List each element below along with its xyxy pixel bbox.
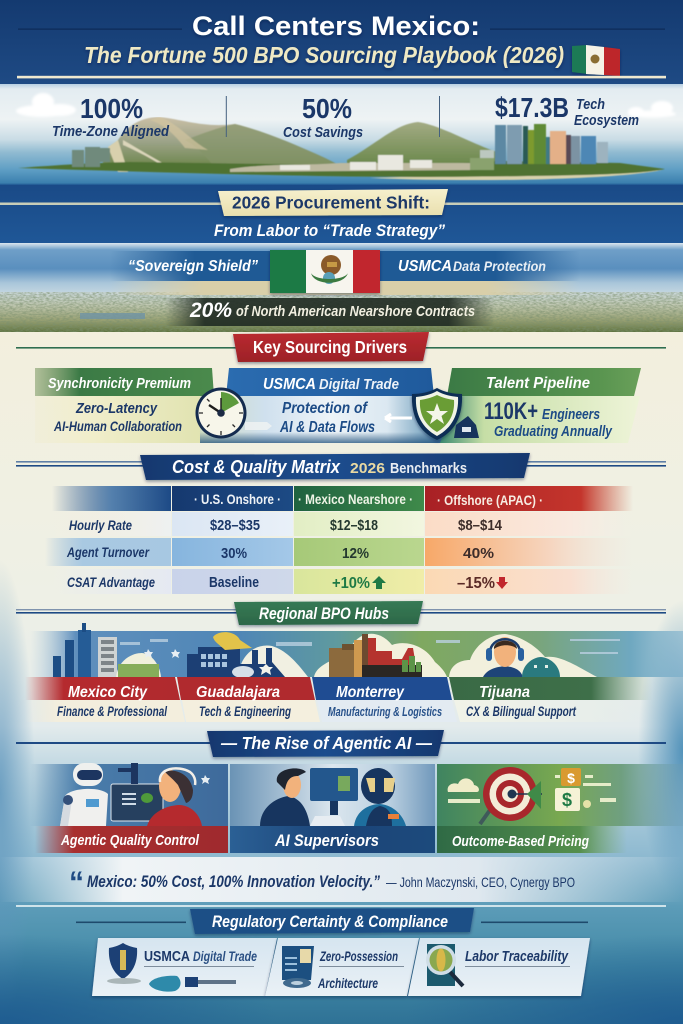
section heading: cost and quality matrix: Benchmarks	[390, 461, 467, 477]
sovereign shield band: Data Protection	[453, 258, 546, 274]
icon: data cable plug	[149, 976, 236, 992]
driver: talent pipeline	[440, 368, 641, 443]
driver: synchronicity premium: Zero-Latency	[75, 400, 158, 417]
stat: 50% cost savings	[283, 93, 363, 141]
quote band: Mexico: 50% Cost, 100% Innovation Velocity.”	[87, 872, 380, 891]
section heading: regional BPO hubs: Regional BPO Hubs	[259, 605, 389, 623]
driver: usmca digital trade: Protection of	[282, 400, 368, 417]
table row: hourly rate: $28–$35	[210, 518, 260, 534]
driver: talent pipeline: Talent Pipeline	[486, 375, 590, 392]
icon: clock	[196, 388, 246, 438]
label: agentic quality control	[35, 826, 228, 853]
card: zero-possession architecture: Zero-Possession	[319, 948, 398, 964]
title: Call Centers Mexico:	[192, 11, 480, 41]
hub: Mexico City: Finance & Professional	[57, 704, 167, 719]
card: zero-possession architecture	[265, 938, 419, 996]
hub: Monterrey	[312, 677, 457, 722]
section heading: the rise of agentic AI	[16, 730, 666, 757]
table row: csat advantage	[52, 569, 633, 594]
hub: Mexico City	[25, 677, 185, 722]
icon: compliance monitor	[282, 946, 314, 988]
sovereign shield band: “Sovereign Shield”	[128, 258, 258, 275]
icon: supervisor monitor	[310, 768, 358, 826]
hubs illustration band	[30, 623, 683, 678]
badge: 2026 procurement shift: 2026 Procurement Shift:	[232, 192, 430, 212]
hub: Tijuana: CX & Bilingual Support	[466, 704, 576, 719]
section heading: key sourcing drivers: Key Sourcing Drivers	[253, 337, 407, 357]
table header row: · Mexico Nearshore ·	[298, 492, 413, 507]
table row: agent turnover	[45, 538, 633, 566]
label: outcome-based pricing: Outcome-Based Pricing	[452, 833, 589, 850]
page background	[0, 332, 683, 1024]
table: cost and quality matrix	[45, 486, 633, 594]
section heading: the rise of agentic AI: — The Rise of Agentic AI —	[220, 733, 432, 753]
quote band: “	[69, 866, 84, 899]
section heading: regulatory certainty and compliance	[16, 905, 666, 934]
icon: dollar tiles	[555, 768, 591, 811]
stat: $17.3B tech ecosystem	[495, 92, 639, 129]
subtitle: The Fortune 500 BPO Sourcing Playbook (2026)	[84, 42, 564, 68]
icon: monitor	[111, 763, 163, 821]
icon: shield	[412, 388, 462, 440]
hub: Guadalajara: Guadalajara	[196, 684, 280, 701]
cityscape strip	[0, 281, 683, 332]
section heading: key sourcing drivers	[16, 332, 666, 362]
hub: Guadalajara: Tech & Engineering	[199, 704, 292, 719]
sovereign shield band: USMCA	[398, 258, 452, 275]
hero panel: island skyline with stats	[0, 84, 683, 185]
icon: Mexican flag small	[572, 45, 620, 76]
table row: hourly rate: $12–$18	[330, 518, 378, 534]
driver: talent pipeline: 110K+	[484, 398, 538, 425]
driver: usmca digital trade	[200, 368, 460, 443]
table header row: · Offshore (APAC) ·	[437, 493, 543, 508]
icon: Guadalajara tech campus	[187, 632, 308, 678]
table row: agent turnover: 40%	[463, 545, 494, 562]
stat: 50% cost savings: Cost Savings	[283, 124, 363, 141]
table row: csat advantage: Baseline	[209, 575, 259, 591]
sovereign shield band	[110, 251, 580, 281]
icon: clouds	[16, 93, 676, 118]
card: outcome-based pricing	[437, 764, 683, 826]
callout: 20% nearshore contracts: 20%	[189, 299, 232, 322]
driver: usmca digital trade: USMCA	[263, 376, 316, 393]
subheading: trade strategy: From Labor to “Trade Strategy”	[214, 222, 446, 240]
driver: talent pipeline: Engineers	[542, 406, 600, 423]
stat: $17.3B tech ecosystem: Tech	[576, 96, 605, 113]
icon: robot supervisor	[354, 768, 406, 826]
card: AI supervisors	[230, 764, 435, 826]
hub: Tijuana: Tijuana	[479, 684, 530, 701]
procurement shift panel	[0, 185, 683, 332]
icon: woman agent	[147, 768, 202, 826]
icon: target with dart	[480, 767, 542, 824]
label: AI supervisors: AI Supervisors	[274, 831, 379, 850]
quote band: — John Maczynski, CEO, Cynergy BPO	[386, 874, 575, 890]
island illustration	[18, 117, 665, 180]
driver: synchronicity premium: Synchronicity Premium	[48, 375, 191, 392]
icon: green up arrow	[372, 576, 386, 589]
icon: Mexico City skyline	[53, 623, 180, 677]
panel: compliance cards	[92, 938, 590, 996]
driver: talent pipeline: Graduating Annually	[494, 423, 613, 440]
table row: csat advantage: CSAT Advantage	[67, 575, 155, 590]
icon: cloud	[448, 778, 479, 792]
label: outcome-based pricing	[437, 826, 627, 853]
driver: usmca digital trade: AI & Data Flows	[279, 419, 375, 436]
table row: agent turnover: 30%	[221, 545, 247, 562]
icon: small campus building	[454, 416, 479, 438]
callout: 20% nearshore contracts	[165, 298, 495, 326]
section heading: cost and quality matrix: Cost & Quality Matrix	[172, 457, 341, 477]
table row: hourly rate	[52, 512, 633, 536]
stat: 100% time-zone aligned	[52, 93, 170, 140]
icon: Mexican flag large	[270, 250, 380, 293]
icon: shield with bar	[107, 943, 141, 984]
icon: dollar tiles: $	[567, 770, 575, 786]
icon: Monterrey industrial plant	[314, 634, 447, 677]
icon: tech towers	[495, 124, 608, 164]
icon: magnifier globe	[426, 944, 463, 986]
label: agentic quality control: Agentic Quality Control	[60, 832, 200, 849]
table row: csat advantage: –15%	[457, 575, 495, 592]
table header row: · U.S. Onshore ·	[194, 492, 281, 507]
section heading: cost and quality matrix	[16, 453, 666, 480]
card: agentic quality control	[30, 763, 228, 826]
icon: Tijuana bilingual agent	[449, 634, 597, 677]
driver: synchronicity premium: AI-Human Collaboration	[53, 418, 182, 434]
table row: agent turnover: Agent Turnover	[66, 545, 150, 560]
panel: agentic AI	[30, 763, 683, 853]
stat: $17.3B tech ecosystem: Ecosystem	[574, 112, 639, 129]
table row: hourly rate: $8–$14	[458, 518, 502, 534]
hub: Monterrey: Manufacturing & Logistics	[328, 704, 442, 719]
quote band	[0, 857, 683, 902]
table row: csat advantage: +10%	[332, 575, 370, 592]
icon: red down arrow	[496, 577, 508, 589]
callout: 20% nearshore contracts: of North American Nearshore Contracts	[236, 303, 475, 320]
card: zero-possession architecture: Architecture	[317, 976, 378, 991]
stat: 50% cost savings: 50%	[302, 93, 352, 124]
driver: usmca digital trade: Digital Trade	[319, 377, 399, 393]
section heading: cost and quality matrix: 2026	[350, 460, 385, 477]
card: labor traceability	[408, 938, 590, 996]
stat: 100% time-zone aligned: Time-Zone Aligned	[52, 123, 170, 140]
panel: sourcing drivers	[35, 368, 641, 443]
table header row	[52, 486, 633, 511]
label: AI supervisors	[230, 826, 435, 853]
badge: 2026 procurement shift	[218, 189, 448, 216]
hub: Tijuana	[449, 677, 652, 722]
header panel	[0, 0, 683, 84]
stat: $17.3B tech ecosystem: $17.3B	[495, 92, 569, 123]
hub: Monterrey: Monterrey	[336, 684, 405, 701]
card: USMCA digital trade: USMCA	[144, 949, 190, 965]
panel: regional hubs	[25, 623, 683, 722]
section heading: regulatory certainty and compliance: Regulatory Certainty & Compliance	[212, 912, 448, 931]
hub: Guadalajara	[177, 677, 320, 722]
card: labor traceability: Labor Traceability	[465, 949, 569, 965]
section heading: regional BPO hubs	[16, 601, 666, 625]
hub: Mexico City: Mexico City	[68, 684, 148, 701]
icon: human supervisor	[260, 768, 310, 826]
icon: dollar tiles: $	[562, 790, 572, 810]
table row: agent turnover: 12%	[342, 545, 369, 562]
card: USMCA digital trade	[92, 938, 277, 996]
icon: robot	[60, 763, 108, 826]
driver: synchronicity premium	[35, 368, 214, 443]
table row: hourly rate: Hourly Rate	[69, 518, 132, 533]
card: USMCA digital trade: Digital Trade	[193, 948, 257, 964]
stat: 100% time-zone aligned: 100%	[80, 93, 143, 124]
